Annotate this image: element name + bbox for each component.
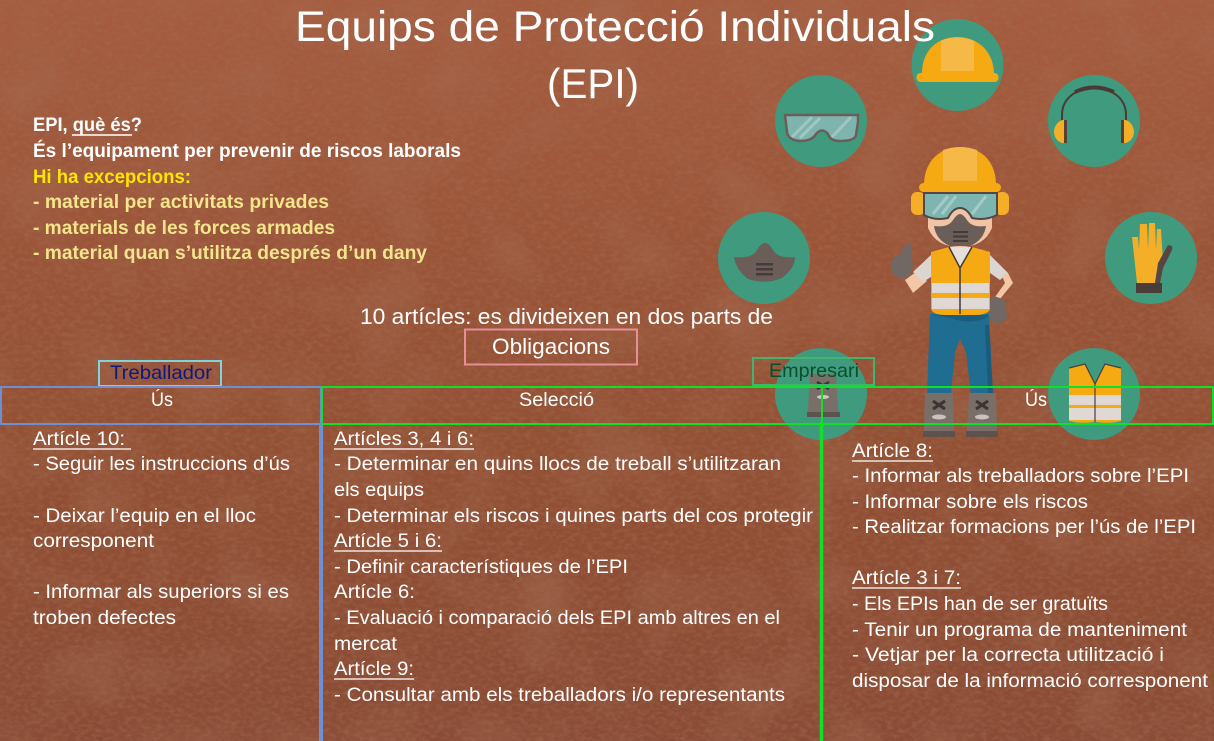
table header: employer selection [322,387,822,424]
label: Obligacions: Obligacions [492,334,610,359]
icon: safety helmet circle [912,19,1004,111]
column divider: worker [319,424,323,741]
table header: employer use: Ús [1025,388,1047,411]
column: employer selection obligations: Artícles 3, 4 i 6: [334,428,474,450]
icon: ear protection circle [1048,75,1140,167]
worker arms [905,255,1013,299]
text block: EPI definition and exceptions: EPI, què és? [33,115,142,136]
column: worker obligations: - Seguir les instruccions d’ús [33,453,290,475]
column: worker obligations: - Informar als superiors si es [33,581,289,603]
text block: EPI definition and exceptions [33,115,461,264]
column: employer selection obligations [334,428,814,706]
title: Equips de Protecció Individuals [295,3,935,51]
column: employer selection obligations: mercat [334,633,398,655]
text block: EPI definition and exceptions: - material per activitats privades [33,192,329,213]
column: employer use obligations: Artícle 8: [852,440,933,462]
column: employer selection obligations: Artícle 6: [334,581,415,603]
column: employer use obligations: - Informar als treballadors sobre l’EPI [852,465,1189,487]
icon: face mask circle [718,212,810,304]
icon: goggles circle [775,75,867,167]
worker gloves [891,243,1007,323]
column divider: employer [820,422,823,741]
column: employer use obligations: Artícle 3 i 7: [852,567,961,589]
icon: glove circle [1105,212,1197,304]
column: worker obligations: Artícle 10: [33,428,125,450]
worker vest [931,247,990,315]
figure: construction worker with PPE [891,147,1013,437]
column: employer use obligations: disposar de la informació corresponent [852,670,1209,692]
column: employer use obligations [852,440,1209,692]
label: Empresari: Empresari [769,360,859,382]
column: employer use obligations: - Tenir un programa de manteniment [852,619,1188,641]
text block: EPI definition and exceptions: - materials de les forces armades [33,218,335,239]
label: Obligacions [465,330,637,364]
column: employer selection obligations: els equips [334,479,424,501]
icon: safety boot circle [775,348,867,440]
label: Empresari [753,358,874,385]
text block: EPI definition and exceptions: - material quan s’utilitza després d’un dany [33,243,427,264]
worker boots [923,393,998,437]
column: employer selection obligations: Artícle 9: [334,658,414,680]
column: employer use obligations: - Informar sobre els riscos [852,491,1088,513]
worker head [911,147,1009,247]
column: employer selection obligations: - Determinar en quins llocs de treball s’utilitzaran [334,453,781,475]
table header: worker use: Ús [151,388,173,411]
column: employer use obligations: - Vetjar per la correcta utilització i [852,644,1164,666]
column: worker obligations: troben defectes [33,607,176,629]
column: worker obligations [33,428,290,629]
text block: EPI definition and exceptions: Hi ha excepcions: [33,167,191,188]
column: employer selection obligations: Artícle 5 i 6: [334,530,442,552]
text block: EPI definition and exceptions: És l’equipament per prevenir de riscos laborals [33,140,461,162]
title [295,3,935,107]
column: worker obligations: corresponent [33,530,155,552]
label: Treballador: Treballador [110,362,213,384]
table header: employer selection: Selecció [519,389,594,411]
column: employer selection obligations: - Consultar amb els treballadors i/o representants [334,684,785,706]
icon: hi-vis vest circle [1048,348,1140,440]
column: employer selection obligations: - Evaluació i comparació dels EPI amb altres en el [334,607,780,629]
table header: employer use [822,387,1213,424]
column: employer use obligations: - Els EPIs han de ser gratuïts [852,593,1108,615]
title: (EPI) [547,60,639,107]
column: employer use obligations: - Realitzar formacions per l’ús de l’EPI [852,516,1196,538]
table header: worker use [1,387,321,424]
column: worker obligations: - Deixar l’equip en el lloc [33,505,256,527]
column: employer selection obligations: - Determinar els riscos i quines parts del cos protegir [334,505,814,527]
column: employer selection obligations: - Definir característiques de l’EPI [334,556,628,578]
worker trousers [927,314,993,394]
text: ten articles intro: 10 artícles: es divideixen en dos parts de [360,304,773,329]
